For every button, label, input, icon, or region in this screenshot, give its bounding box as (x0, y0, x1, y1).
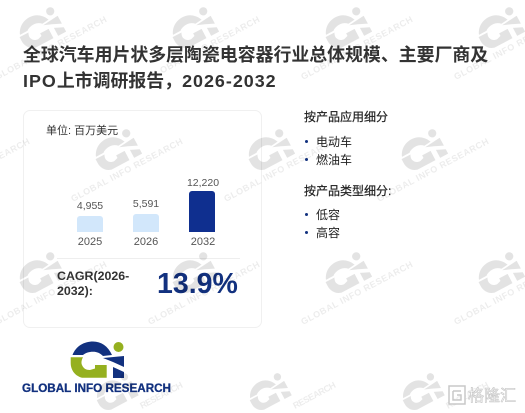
title (23, 45, 488, 91)
bullet (305, 213, 308, 216)
year label 2025: 2025 (78, 236, 102, 248)
watermark layer: RESEARCH (291, 380, 337, 411)
watermark layer: GLOBAL INFO RESEARCH (146, 14, 261, 82)
source mark: Gelonghui (448, 385, 516, 405)
value label 2026: 5,591 (133, 198, 159, 210)
heading: by type: 按产品类型细分: (304, 184, 391, 198)
item: fuel vehicles: 燃油车 (316, 153, 352, 167)
bullet (305, 231, 308, 234)
source mark: Gelonghui: 格隆汇 (468, 387, 516, 405)
title: 全球汽车用片状多层陶瓷电容器行业总体规模、主要厂商及 (23, 45, 488, 65)
logo: Global Info Research (22, 342, 171, 395)
watermark layer: GLOBAL INFO RESEARCH (299, 259, 414, 327)
panel: market size card (23, 110, 262, 328)
value label 2032: 12,220 (187, 177, 219, 189)
watermark layer: GLOBAL INFO RESEARCH (375, 136, 490, 204)
CAGR value: 13.9% (157, 268, 238, 300)
item: low capacitance: 低容 (316, 208, 340, 222)
watermark layer: GLOBAL INFO RESEARCH (222, 136, 337, 204)
watermark layer: RESEARCH (444, 380, 490, 411)
bar 2025 (77, 216, 103, 232)
watermark layer: GLOBAL INFO RESEARCH (69, 136, 184, 204)
title: IPO上市调研报告，2026-2032 (23, 71, 277, 91)
year label 2032: 2032 (191, 236, 215, 248)
bullet (305, 140, 308, 143)
year label 2026: 2026 (134, 236, 158, 248)
bullet (305, 158, 308, 161)
logo: Global Info Research: GLOBAL INFO RESEARCH (22, 381, 171, 395)
CAGR label: CAGR(2026- (57, 269, 129, 283)
watermark layer: RESEARCH (138, 380, 184, 411)
CAGR label (57, 269, 129, 298)
watermark layer: GLOBAL INFO RESEARCH (146, 259, 261, 327)
item: high capacitance: 高容 (316, 226, 340, 240)
bar 2032 (189, 191, 215, 232)
unit label: 单位: 百万美元 (46, 125, 118, 137)
watermark layer: GLOBAL INFO RESEARCH (299, 14, 414, 82)
heading: by application: 按产品应用细分 (304, 110, 388, 124)
CAGR label: 2032): (57, 284, 93, 298)
item: electric vehicles: 电动车 (316, 135, 352, 149)
value label 2025: 4,955 (77, 200, 103, 212)
bar chart (77, 177, 219, 248)
bar 2026 (133, 214, 159, 232)
